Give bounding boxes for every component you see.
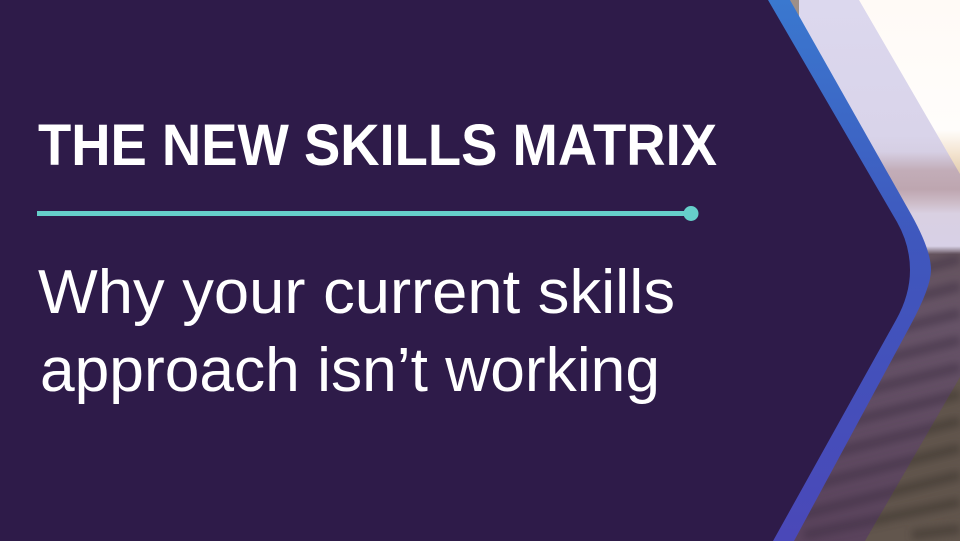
blue chevron edge xyxy=(760,0,931,541)
background photo xyxy=(790,0,960,541)
subtitle: Why your current skills xyxy=(38,258,675,327)
divider line with dot xyxy=(37,206,698,221)
title: THE NEW SKILLS MATRIX xyxy=(38,113,717,178)
subtitle xyxy=(38,258,675,405)
olive lower corner xyxy=(865,377,960,541)
translucent lavender chevron band xyxy=(780,0,960,541)
shaded blinds stripes xyxy=(806,254,960,538)
subtitle: approach isn’t working xyxy=(40,336,660,405)
brown patch at top of band xyxy=(785,0,799,24)
